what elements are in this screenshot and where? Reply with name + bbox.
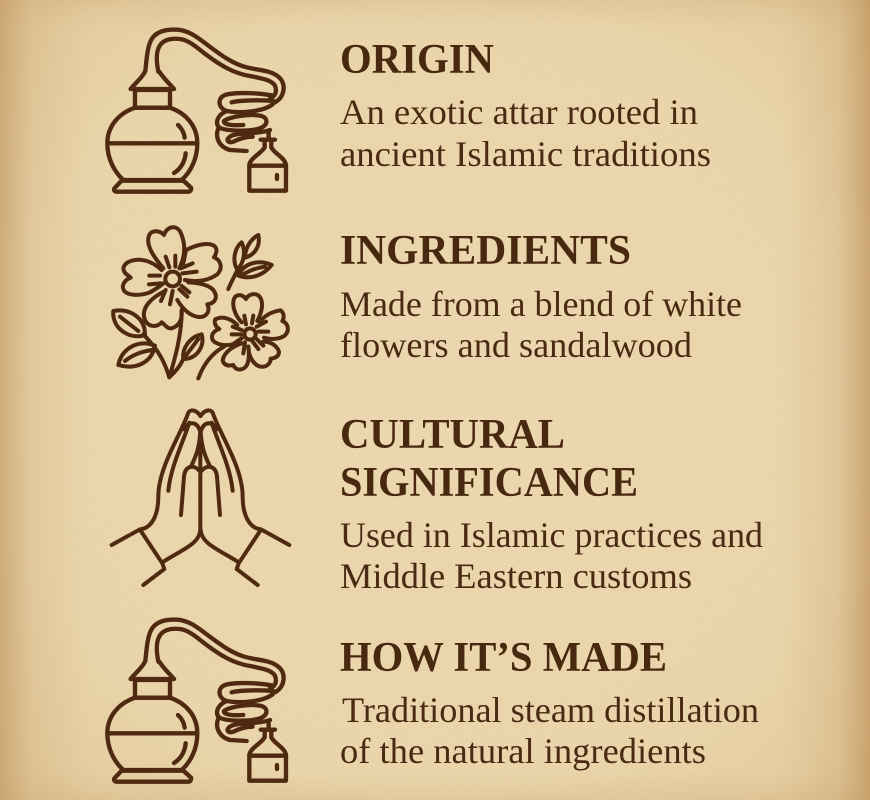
text: how it's made description bbox=[340, 690, 759, 771]
still flask bbox=[107, 72, 197, 192]
condenser coil bbox=[217, 93, 273, 151]
text: cultural significance description bbox=[340, 515, 763, 596]
small flower bbox=[198, 294, 288, 378]
text: ingredients description: Made from a blend of white bbox=[340, 284, 742, 324]
still pipe bbox=[145, 620, 284, 692]
icon: flowers (ingredients) bbox=[113, 227, 288, 378]
text: origin description: ancient Islamic traditions bbox=[340, 134, 711, 174]
text: cultural significance description: Used in Islamic practices and bbox=[340, 515, 763, 555]
left hand bbox=[112, 410, 200, 585]
still pipe bbox=[145, 30, 284, 102]
heading: origin: ORIGIN bbox=[340, 37, 494, 83]
receiving bottle bbox=[249, 140, 286, 191]
condenser coil bbox=[217, 683, 273, 741]
heading: cultural significance: CULTURAL bbox=[340, 412, 565, 458]
heading: cultural significance: SIGNIFICANCE bbox=[340, 460, 638, 506]
text: how it's made description: Traditional steam distillation bbox=[342, 690, 759, 730]
icon: distillation still (origin) bbox=[107, 30, 286, 192]
text: ingredients description: flowers and sandalwood bbox=[340, 325, 692, 365]
center line bbox=[194, 432, 206, 530]
icon: praying hands (cultural significance) bbox=[112, 410, 289, 585]
still flask bbox=[107, 662, 197, 782]
heading: cultural significance bbox=[340, 412, 638, 506]
text: how it's made description: of the natural ingredients bbox=[340, 731, 706, 771]
text: origin description: An exotic attar rooted in bbox=[340, 92, 698, 132]
text: origin description bbox=[340, 92, 711, 174]
stem and leaves bbox=[113, 310, 202, 377]
leaf sprig bbox=[228, 235, 272, 289]
text: cultural significance description: Middle Eastern customs bbox=[340, 556, 692, 596]
icon: distillation still (how it's made) bbox=[107, 620, 286, 782]
text: ingredients description bbox=[340, 284, 742, 365]
heading: how it's made: HOW IT’S MADE bbox=[340, 635, 667, 681]
heading: ingredients: INGREDIENTS bbox=[340, 228, 631, 274]
receiving bottle bbox=[249, 730, 286, 781]
right hand bbox=[201, 410, 289, 585]
large flower bbox=[123, 227, 221, 328]
